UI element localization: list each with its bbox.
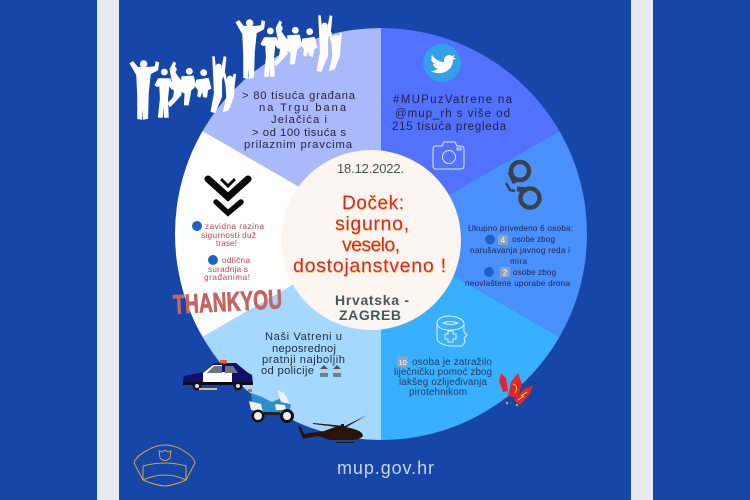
icon: police cap: [134, 445, 195, 486]
text: medical help: liječničku pomoć zbog: [394, 367, 492, 378]
text: arrests: narušavanja javnog reda i: [470, 246, 570, 255]
text: crowd numbers: na Trgu bana: [259, 102, 347, 114]
panel: centre circle: [281, 150, 461, 330]
icon: police officers: [320, 365, 341, 377]
text: crowd numbers: Jelačića i: [271, 114, 327, 126]
headline shadow: dostojanstveno !: [294, 256, 446, 278]
headline: Doček:: [342, 193, 404, 214]
date: 18.12.2022.: [337, 161, 404, 176]
text: arrests: mira: [510, 257, 527, 266]
text: escort: pratnji najboljih: [262, 354, 345, 366]
headline: veselo,: [342, 234, 400, 256]
text: medical help: [394, 356, 493, 398]
icon: helicopter: [298, 415, 367, 443]
icon: crowd right: [236, 16, 342, 78]
text: crowd numbers: > 80 tisuća građana: [242, 90, 356, 102]
icon: police car: [183, 360, 253, 390]
location: Hrvatska -: [335, 292, 409, 308]
icon: crowd left: [130, 57, 236, 119]
icon: bandage: [437, 316, 467, 346]
text: arrests: Ukupno privedeno 6 osoba:: [468, 224, 573, 233]
text: medical help: pirotehnikom: [409, 387, 467, 398]
headline shadow: veselo,: [342, 235, 400, 257]
icon: camera: [433, 142, 464, 169]
text: website: mup.gov.hr: [337, 458, 434, 478]
text: medical help: 10: [398, 358, 407, 367]
text: crowd numbers: > od 100 tisuća s: [252, 127, 346, 139]
headline: sigurno,: [335, 213, 409, 235]
text: twitter views: @mup_rh s više od: [395, 108, 510, 120]
icon: fireworks: [499, 373, 533, 406]
headline shadow: [294, 194, 446, 278]
icon: police motorcycle: [248, 389, 294, 423]
text: security and cooperation: odlična: [222, 256, 250, 265]
text: arrests: osobe zbog: [513, 268, 556, 277]
headline: dostojanstveno !: [293, 255, 446, 277]
text: twitter views: #MUPuzVatrene na: [393, 94, 513, 106]
text: arrests: 4: [501, 236, 506, 245]
text: escort: Naši Vatreni u: [265, 331, 342, 343]
headline shadow: sigurno,: [336, 214, 410, 236]
text: twitter views: [392, 94, 513, 133]
location: [335, 292, 409, 323]
text: arrests: 2: [503, 268, 508, 278]
text: arrests: osobe zbog: [512, 235, 555, 244]
icon: handcuffs: [506, 162, 540, 208]
text: security and cooperation: suradnja s: [208, 265, 248, 274]
headline: [293, 193, 446, 277]
text: security and cooperation: sigurnosti duž: [201, 231, 256, 240]
text: thank you: THANKYOU: [172, 284, 283, 320]
text: crowd numbers: [242, 90, 356, 151]
text: arrests: [465, 224, 573, 288]
text: medical help: osoba je zatražilo: [412, 357, 493, 368]
text: arrests: neovlaštene uporabe drona: [465, 279, 570, 288]
wheel chart: [175, 28, 587, 440]
text: twitter views: 215 tisuća pregleda: [392, 121, 507, 133]
icon: chevrons: [208, 179, 248, 213]
text: security and cooperation: građanima!: [204, 273, 250, 282]
text: escort: [261, 331, 345, 377]
text: escort: neposrednoj: [272, 343, 336, 355]
text: security and cooperation: trase!: [216, 239, 237, 248]
text: medical help: lakšeg ozlijeđivanja: [399, 377, 488, 388]
text: security and cooperation: [192, 221, 264, 282]
text: crowd numbers: prilaznim pravcima: [244, 139, 353, 151]
text: escort: od policije: [261, 365, 314, 377]
icon: twitter: [423, 44, 461, 82]
text: security and cooperation: zavidna razina: [205, 222, 264, 231]
location: ZAGREB: [339, 307, 401, 323]
headline shadow: Doček:: [342, 194, 404, 215]
